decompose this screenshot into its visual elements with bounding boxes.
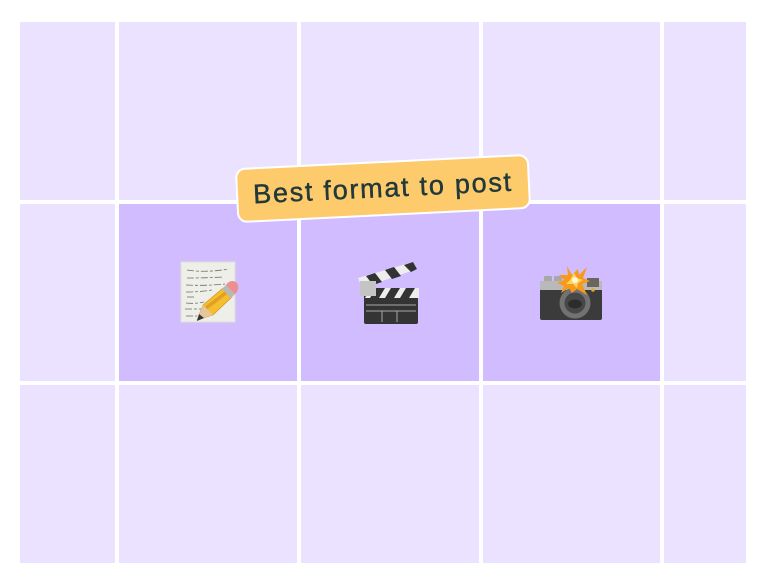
icon: camera with flash [540, 266, 602, 320]
icon: memo with pencil [180, 262, 238, 322]
callout: best format to post [235, 154, 531, 223]
callout: best format to post: Best format to post [252, 167, 513, 209]
icon: clapper board [358, 262, 419, 324]
